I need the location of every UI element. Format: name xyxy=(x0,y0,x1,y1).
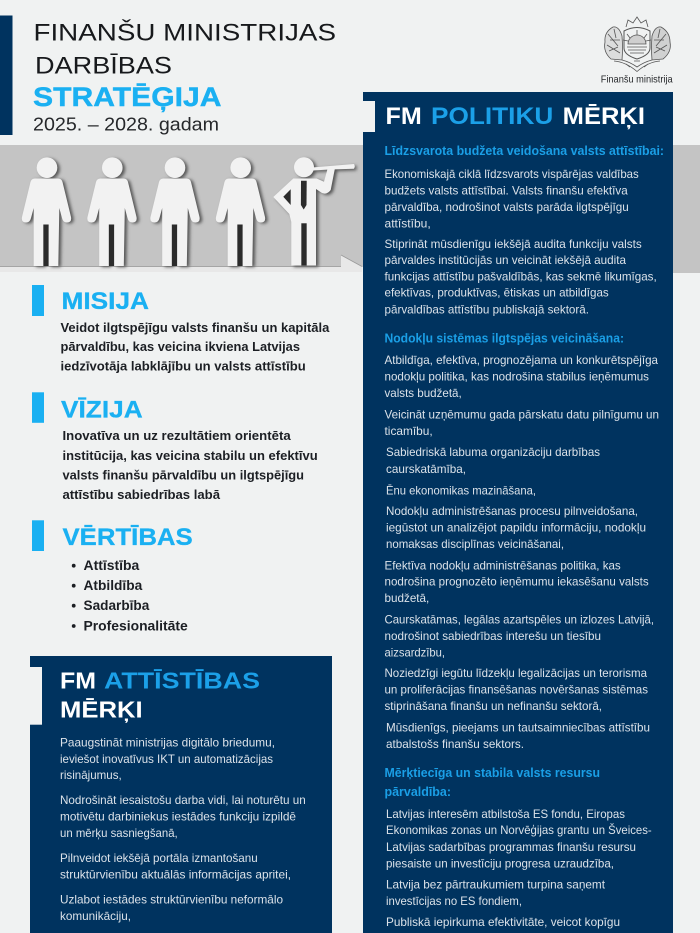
section: balanced budget: Ekonomiskajā ciklā līdzsvarots vispārējas valdības xyxy=(384,167,639,181)
development goals text: Uzlabot iestādes struktūrvienību neformālo xyxy=(60,893,283,907)
section: balanced budget: efektīvas, produktīvas, ētiskas un atbildīgas xyxy=(384,286,609,300)
development goals text: komunikāciju, xyxy=(60,909,131,923)
title xyxy=(33,19,336,135)
development goals text: motivētu darbiniekus iestādes funkciju izpildē xyxy=(60,810,296,824)
logo: Finanšu ministrija xyxy=(601,17,673,86)
section: tax system: Noziedzīgi iegūtu līdzekļu legalizācijas un terorisma xyxy=(384,666,647,680)
title: DARBĪBAS xyxy=(35,52,172,79)
section: tax system: budžetā, xyxy=(384,591,429,605)
panel: FM attīstības mērķi xyxy=(30,656,332,933)
section: tax system: Nodokļu sistēmas ilgtspējas veicināšana: xyxy=(384,331,624,345)
misija text xyxy=(60,321,330,374)
development goals text xyxy=(60,735,306,923)
vērtības list: Atbildība xyxy=(84,578,143,593)
vīzija text: Inovatīva un uz rezultātiem orientēta xyxy=(62,429,292,443)
misija heading: MISIJA xyxy=(62,288,149,315)
development goals text: Pilnveidot iekšējā portāla izmantošanu xyxy=(60,851,258,865)
figure 3 xyxy=(150,157,202,267)
section: state resources: Latvijas interesēm atbilstoša ES fondu, Eiropas xyxy=(386,807,625,821)
section: state resources: investīcijas no ES fondiem, xyxy=(386,894,522,908)
section: tax system: Ēnu ekonomikas mazināšana, xyxy=(386,484,536,498)
panel notch xyxy=(363,101,375,132)
photo: figures with telescope xyxy=(0,145,700,273)
vīzija accent bar xyxy=(32,392,44,423)
section: state resources: Latvija bez pārtraukumiem turpina saņemt xyxy=(386,878,606,892)
heading: FM politiku mērķi xyxy=(386,103,645,130)
heading: FM attīstības mērķi: ATTĪSTĪBAS xyxy=(104,667,260,693)
section: tax system: stiprināšana finanšu un nefinanšu sektorā, xyxy=(384,699,602,713)
title: 2025. – 2028. gadam xyxy=(33,115,219,135)
section: balanced budget xyxy=(384,144,664,316)
section: tax system xyxy=(384,331,659,751)
misija text: iedzīvotāja labklājību un valsts attīstību xyxy=(60,360,306,374)
misija accent bar xyxy=(32,285,44,316)
section: tax system: nomaksas disciplīnas veicināšanai, xyxy=(386,537,564,551)
section: tax system: atbalstošs finanšu sektors. xyxy=(386,737,524,751)
development goals text: struktūrvienību aktuālās informācijas apritei, xyxy=(60,868,291,882)
figure 1 xyxy=(22,157,74,267)
section: vīzija xyxy=(32,392,318,502)
section: tax system: Efektīva nodokļu administrēšanas politika, kas xyxy=(384,558,621,572)
vērtības accent bar xyxy=(32,520,44,551)
section: balanced budget: pārvaldība, nodrošinot valsts parāda ilgtspējīgu xyxy=(384,200,629,214)
heading: FM politiku mērķi: FM xyxy=(386,103,422,130)
section: state resources: Mērķtiecīga un stabila valsts resursu xyxy=(384,766,600,780)
section: balanced budget: funkcijas attīstību pašvaldībās, kas sekmē likumīgas, xyxy=(384,270,657,284)
section: tax system: Veicināt uzņēmumu gada pārskatu datu pilnīgumu un xyxy=(384,408,659,422)
misija text: Veidot ilgtspējīgu valsts finanšu un kapitāla xyxy=(60,321,330,335)
vīzija text: attīstību sabiedrības labā xyxy=(62,488,221,502)
section: tax system: nodrošinot sabiedrības interešu un tiesību xyxy=(384,629,601,643)
section: state resources: piesaiste un investīciju progresa uzraudzība, xyxy=(386,857,614,871)
section: state resources: pārvaldība: xyxy=(384,785,451,799)
section: tax system: Sabiedriskā labuma organizāciju darbības xyxy=(386,445,600,459)
section: balanced budget: Līdzsvarota budžeta veidošana valsts attīstībai: xyxy=(384,144,664,158)
arrow ground strip xyxy=(0,255,362,272)
title: FINANŠU MINISTRIJAS xyxy=(34,19,336,47)
section: balanced budget: attīstību, xyxy=(384,216,431,230)
vīzija text: valsts finanšu pārvaldību un ilgtspējīgu xyxy=(62,468,304,482)
heading: FM attīstības mērķi xyxy=(60,667,260,722)
section: balanced budget: Stiprināt mūsdienīgu iekšējā audita funkciju valsts xyxy=(384,237,642,251)
section: state resources xyxy=(384,766,652,929)
section: tax system: Mūsdienīgs, pieejams un tautsaimniecības attīstību xyxy=(386,721,650,735)
vērtības list xyxy=(72,558,188,633)
development goals text: Nodrošināt iesaistošu darba vidi, lai noturētu un xyxy=(60,793,306,807)
section: balanced budget: pārvaldības attīstību publiskajā sektorā. xyxy=(384,302,589,316)
heading: FM politiku mērķi: MĒRĶI xyxy=(563,103,645,130)
heading: FM attīstības mērķi: MĒRĶI xyxy=(60,696,143,722)
section: tax system: caurskatāmība, xyxy=(386,462,466,476)
icon: coat of arms xyxy=(605,17,670,72)
section: state resources: Latvijas sadarbības programmas finanšu resursu xyxy=(386,840,636,854)
heading: FM attīstības mērķi: FM xyxy=(60,667,96,693)
section: tax system: valsts budžetā, xyxy=(384,386,462,400)
section: misija xyxy=(32,285,330,374)
section: tax system: nodokļu politika, kas nodrošina stabilus ieņēmumus xyxy=(384,370,649,384)
heading: FM politiku mērķi: POLITIKU xyxy=(431,103,553,130)
vīzija heading: VĪZIJA xyxy=(61,397,143,424)
vīzija text xyxy=(62,429,318,502)
section: balanced budget: budžets valsts attīstībai. Valsts finanšu efektīva xyxy=(384,183,628,197)
section: balanced budget: pārvaldes institūcijās un veicināt iekšējā audita xyxy=(384,253,626,267)
panel notch xyxy=(30,667,42,725)
section: tax system: iegūstot un analizējot papildu informāciju, nodokļu xyxy=(386,521,646,535)
vērtības list: Attīstība xyxy=(84,558,140,573)
development goals text: un mērķu sasniegšanā, xyxy=(60,826,178,840)
vērtības list: Profesionalitāte xyxy=(84,618,188,633)
title: STRATĒĢIJA xyxy=(33,82,222,112)
figure 4 xyxy=(216,157,268,267)
section: vērtības xyxy=(32,520,193,633)
section: tax system: ticamību, xyxy=(384,424,433,438)
vīzija text: institūcija, kas veicina stabilu un efektīvu xyxy=(62,449,318,463)
figure 2 xyxy=(87,157,139,267)
section: tax system: aizsardzību, xyxy=(384,646,445,660)
development goals text: Paaugstināt ministrijas digitālo briedumu, xyxy=(60,735,275,749)
development goals text: risinājumus, xyxy=(60,768,122,782)
section: tax system: Atbildīga, efektīva, prognozējama un konkurētspējīga xyxy=(384,353,658,367)
development goals text: ieviešot inovatīvus IKT un automatizācijas xyxy=(60,752,273,766)
section: state resources: Publiskā iepirkuma efektivitāte, veicot kopīgu xyxy=(386,915,620,929)
vērtības heading: VĒRTĪBAS xyxy=(62,524,193,551)
misija text: pārvaldību, kas veicina ikviena Latvijas xyxy=(60,340,300,354)
figure 5 with telescope xyxy=(273,157,356,267)
section: tax system: Caurskatāmas, legālas azartspēles un izlozes Latvijā, xyxy=(384,613,654,627)
panel: FM politiku mērķi xyxy=(363,92,673,933)
header accent bar xyxy=(0,16,12,135)
section: tax system: nodrošina prognozēto ieņēmumu iekasēšanu valsts xyxy=(384,575,649,589)
vērtības list: Sadarbība xyxy=(84,598,150,613)
section: tax system: un proliferācijas finansēšanas novēršanas sistēmas xyxy=(384,683,648,697)
section: state resources: Ekonomikas zonas un Norvēģijas grantu un Šveices- xyxy=(386,822,652,837)
section: tax system: Nodokļu administrēšanas procesu pilnveidošana, xyxy=(386,504,638,518)
logo caption: Finanšu ministrija xyxy=(601,74,673,86)
